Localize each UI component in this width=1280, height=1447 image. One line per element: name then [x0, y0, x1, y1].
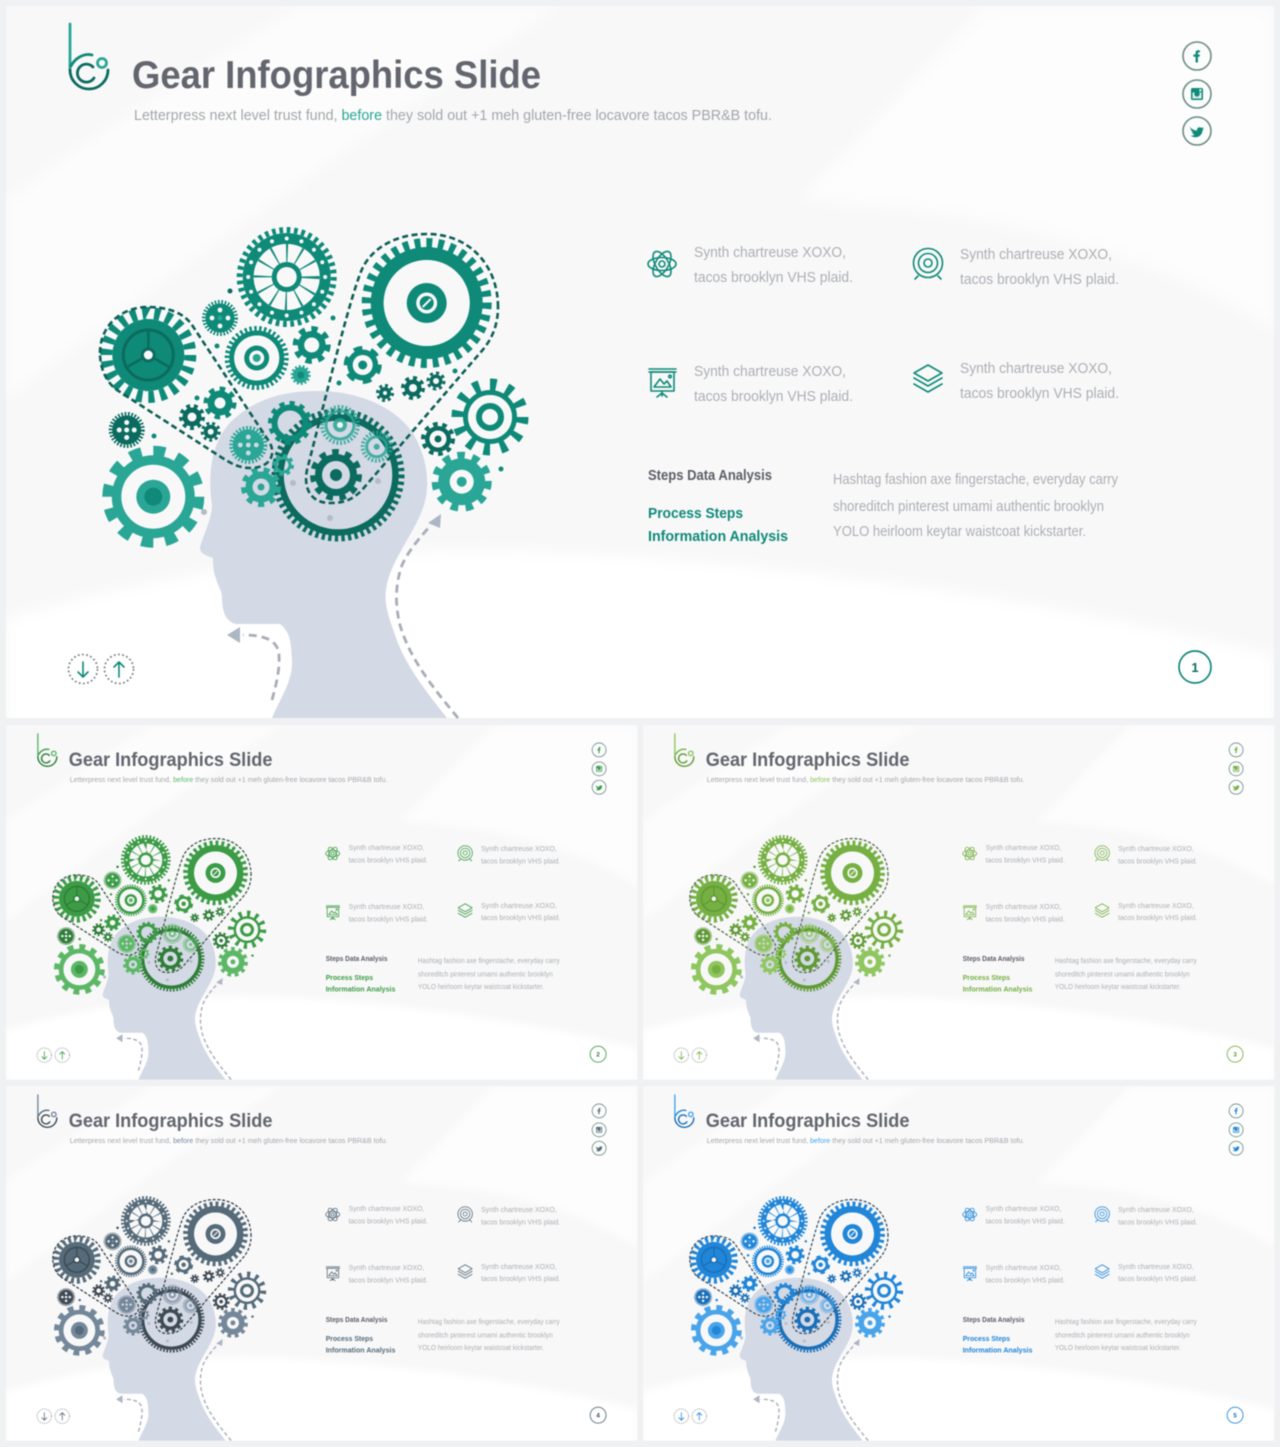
feature texts: Synth chartreuse XOXO,	[349, 902, 424, 911]
headings: Process Steps	[963, 973, 1010, 982]
feature texts: Synth chartreuse XOXO,	[481, 1262, 557, 1271]
paragraph	[418, 956, 560, 991]
artwork	[6, 1086, 637, 1447]
feature texts: tacos brooklyn VHS plaid.	[986, 1276, 1065, 1285]
paragraph: YOLO heirloom keytar waistcoat kickstarter.	[1055, 982, 1181, 991]
paragraph: Hashtag fashion axe fingerstache, everyday carry	[1055, 956, 1197, 965]
gear: big lower left gear	[108, 452, 198, 542]
title: Gear Infographics Slide	[706, 749, 910, 771]
feature texts: tacos brooklyn VHS plaid.	[481, 1274, 560, 1283]
feature texts: tacos brooklyn VHS plaid.	[349, 1216, 428, 1225]
feature texts: tacos brooklyn VHS plaid.	[349, 1276, 428, 1285]
page number: 4	[596, 1413, 600, 1420]
paragraph	[1055, 956, 1197, 991]
gear: head crescent gear	[270, 404, 310, 442]
arrow: rising dashed arrow	[396, 514, 458, 718]
icon: facebook	[1183, 42, 1211, 70]
title: Gear Infographics Slide	[69, 1110, 273, 1132]
paragraph: shoreditch pinterest umami authentic brooklyn	[1055, 1330, 1190, 1339]
slide: slate grey variant	[6, 1086, 637, 1447]
feature texts: tacos brooklyn VHS plaid.	[481, 913, 560, 922]
gear: small dotted gear	[204, 302, 236, 334]
slide: main teal	[6, 6, 1274, 730]
heading: information analysis: Information Analysis	[648, 529, 788, 545]
feature texts: tacos brooklyn VHS plaid.	[481, 856, 560, 865]
paragraph: Hashtag fashion axe fingerstache, everyday carry	[418, 1317, 560, 1326]
subtitle: Letterpress next level trust fund, before they sold out +1 meh gluten-free locavore tacos PBR&B tofu.	[707, 1136, 1024, 1145]
page number: 1	[1191, 660, 1199, 675]
gear: large right gear	[367, 243, 487, 363]
slide background	[6, 6, 1274, 730]
headings: Process Steps	[963, 1334, 1010, 1343]
gear: central dark gear	[313, 452, 359, 498]
gear: three small dark cogs	[378, 373, 444, 400]
subtitle: Letterpress next level trust fund, before they sold out +1 meh gluten-free locavore tacos PBR&B tofu.	[70, 1136, 387, 1145]
arrow: neck dashed arrow	[227, 627, 279, 700]
title: Gear Infographics Slide	[69, 749, 273, 771]
slide: lime variant	[643, 725, 1274, 1086]
title: Gear Infographics Slide	[132, 54, 541, 97]
gear: top small cog	[296, 329, 328, 361]
feature texts: Synth chartreuse XOXO,	[349, 843, 424, 852]
headings: Information Analysis	[963, 1345, 1032, 1354]
paragraph: YOLO heirloom keytar waistcoat kickstarter.	[418, 1343, 544, 1352]
feature texts: Synth chartreuse XOXO,	[986, 1204, 1061, 1213]
paragraph: shoreditch pinterest umami authentic brooklyn	[418, 1330, 553, 1339]
feature texts: tacos brooklyn VHS plaid.	[1118, 1274, 1197, 1283]
heading: steps data analysis: Steps Data Analysis	[648, 468, 772, 484]
icon: layers	[914, 365, 942, 392]
gear: top spoked wheel	[240, 230, 334, 324]
paragraph: shoreditch pinterest umami authentic brooklyn	[1055, 969, 1190, 978]
headings: Process Steps	[326, 973, 373, 982]
page number: 2	[596, 1052, 600, 1059]
icon: twitter	[1183, 117, 1211, 145]
gear: large hub gear inside head	[274, 412, 402, 538]
feature texts: tacos brooklyn VHS plaid.	[1118, 1217, 1197, 1226]
feature text 2 line 2: tacos brooklyn VHS plaid.	[960, 272, 1119, 288]
feature texts: Synth chartreuse XOXO,	[349, 1263, 424, 1272]
feature texts	[349, 1204, 560, 1285]
slide: green variant	[6, 725, 637, 1086]
icon: target	[914, 248, 942, 279]
headings: Steps Data Analysis	[963, 954, 1024, 963]
feature texts: tacos brooklyn VHS plaid.	[349, 915, 428, 924]
logo	[70, 24, 108, 89]
paragraph: Hashtag fashion axe fingerstache, everyday carry	[418, 956, 560, 965]
headings: Steps Data Analysis	[326, 954, 387, 963]
feature text 1: Synth chartreuse XOXO,	[694, 245, 846, 261]
feature texts: tacos brooklyn VHS plaid.	[1118, 913, 1197, 922]
artwork	[6, 725, 637, 1086]
gear: dotted gear on head	[231, 428, 265, 462]
gear: lower right light gear	[435, 455, 488, 508]
icon: presentation board	[649, 369, 676, 397]
gear: hexagonal cog	[347, 349, 379, 381]
title: Gear Infographics Slide	[706, 1110, 910, 1132]
gear: lower head light gear	[244, 470, 278, 504]
feature text 3: Synth chartreuse XOXO,	[694, 364, 846, 380]
gear: small light head gear	[274, 456, 292, 474]
feature text 3 line 2: tacos brooklyn VHS plaid.	[694, 389, 853, 405]
icon: down arrow	[68, 654, 98, 684]
paragraph: Hashtag fashion axe fingerstache, everyday carry	[1055, 1317, 1197, 1326]
artwork	[643, 1086, 1274, 1447]
paragraph	[418, 1317, 560, 1352]
feature texts: Synth chartreuse XOXO,	[481, 844, 557, 853]
gear: right small dark gear	[423, 424, 453, 454]
headings: Process Steps	[326, 1334, 373, 1343]
dashed outline: right gear belt	[306, 234, 498, 503]
paragraph: YOLO heirloom keytar waistcoat kickstarter.	[418, 982, 544, 991]
gear: right spiky gear	[458, 385, 522, 449]
feature texts: Synth chartreuse XOXO,	[1118, 1205, 1194, 1214]
headings	[963, 1315, 1032, 1354]
page number ring	[1179, 651, 1211, 683]
feature texts: Synth chartreuse XOXO,	[1118, 901, 1194, 910]
feature texts: tacos brooklyn VHS plaid.	[1118, 856, 1197, 865]
headings: Information Analysis	[326, 984, 395, 993]
headings: Steps Data Analysis	[963, 1315, 1024, 1324]
slide artwork	[6, 6, 1274, 730]
feature text 4: Synth chartreuse XOXO,	[960, 361, 1112, 377]
feature text 4 line 2: tacos brooklyn VHS plaid.	[960, 386, 1119, 402]
feature texts	[349, 843, 560, 924]
feature texts	[986, 1204, 1197, 1285]
gear: cluster of three left cogs	[181, 389, 234, 440]
feature texts	[986, 843, 1197, 924]
feature texts: tacos brooklyn VHS plaid.	[986, 915, 1065, 924]
feature text 2: Synth chartreuse XOXO,	[960, 247, 1112, 263]
artwork	[643, 725, 1274, 1086]
subtitle: Letterpress next level trust fund, before they sold out +1 meh gluten-free locavore tacos PBR&B tofu.	[707, 775, 1024, 784]
feature text 1 line 2: tacos brooklyn VHS plaid.	[694, 270, 853, 286]
dashed outline: left gear belt	[100, 307, 272, 468]
paragraph line 1: Hashtag fashion axe fingerstache, everyday carry	[833, 472, 1119, 488]
feature texts: Synth chartreuse XOXO,	[349, 1204, 424, 1213]
headings	[326, 954, 395, 993]
paragraph line 3: YOLO heirloom keytar waistcoat kickstarter.	[833, 524, 1086, 540]
icon: instagram	[1183, 80, 1211, 108]
gear: translucent top head gear	[322, 407, 358, 443]
gear: dark dotted gear	[111, 414, 143, 446]
headings: Steps Data Analysis	[326, 1315, 387, 1324]
icon: atom	[648, 249, 676, 279]
feature texts: Synth chartreuse XOXO,	[1118, 844, 1194, 853]
decorative small dots	[152, 288, 504, 521]
feature texts: tacos brooklyn VHS plaid.	[481, 1217, 560, 1226]
feature texts: Synth chartreuse XOXO,	[481, 901, 557, 910]
feature texts: tacos brooklyn VHS plaid.	[986, 1216, 1065, 1225]
headings	[326, 1315, 395, 1354]
paragraph	[1055, 1317, 1197, 1352]
page number: 3	[1233, 1052, 1237, 1059]
gear: left gear with tri-spoke hub	[106, 313, 190, 397]
social icons	[1183, 42, 1211, 145]
heading: process steps: Process Steps	[648, 506, 743, 522]
paragraph: YOLO heirloom keytar waistcoat kickstarter.	[1055, 1343, 1181, 1352]
feature texts: Synth chartreuse XOXO,	[481, 1205, 557, 1214]
navigation arrows	[68, 654, 134, 684]
headings	[963, 954, 1032, 993]
head silhouette	[200, 391, 447, 718]
page number: 5	[1233, 1413, 1237, 1420]
subtitle: Letterpress next level trust fund, before they sold out +1 meh gluten-free locavore tacos PBR&B tofu.	[70, 775, 387, 784]
feature texts: Synth chartreuse XOXO,	[986, 843, 1061, 852]
slide: blue variant	[643, 1086, 1274, 1447]
gear: middle ring gear	[227, 328, 286, 388]
icon: up arrow	[104, 654, 134, 684]
gear: tiny cog	[292, 366, 309, 384]
gear: translucent right head gear	[363, 433, 391, 461]
feature texts: Synth chartreuse XOXO,	[1118, 1262, 1194, 1271]
subtitle: Letterpress next level trust fund, before they sold out +1 meh gluten-free locavore tacos PBR&B tofu.	[134, 108, 772, 124]
paragraph line 2: shoreditch pinterest umami authentic brooklyn	[833, 499, 1104, 515]
feature icons	[648, 248, 942, 397]
feature texts: Synth chartreuse XOXO,	[986, 1263, 1061, 1272]
feature texts: tacos brooklyn VHS plaid.	[986, 855, 1065, 864]
headings: Information Analysis	[326, 1345, 395, 1354]
feature texts: Synth chartreuse XOXO,	[986, 902, 1061, 911]
paragraph: shoreditch pinterest umami authentic brooklyn	[418, 969, 553, 978]
headings: Information Analysis	[963, 984, 1032, 993]
feature texts: tacos brooklyn VHS plaid.	[349, 855, 428, 864]
gear cluster	[106, 230, 522, 542]
